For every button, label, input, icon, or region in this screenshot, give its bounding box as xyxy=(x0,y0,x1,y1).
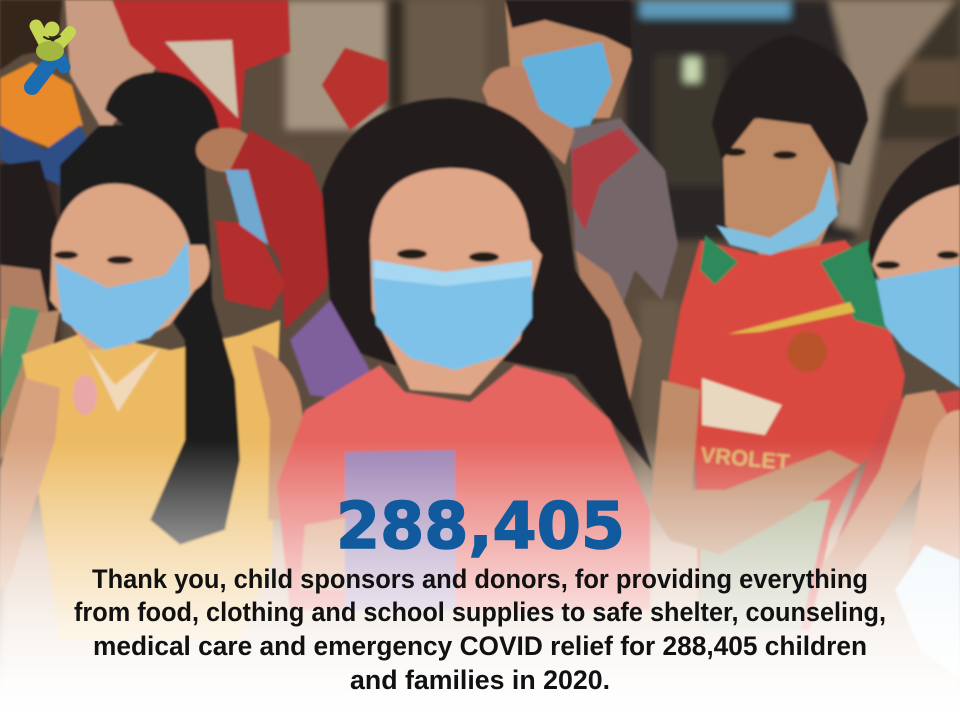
white bottom fade xyxy=(0,440,960,720)
message text: medical care and emergency COVID relief for 288,405 children xyxy=(93,631,867,661)
message text: from food, clothing and school supplies to safe shelter, counseling, xyxy=(74,597,886,627)
standing child in red xyxy=(105,0,388,330)
rear boy with mask xyxy=(482,0,678,400)
left girl xyxy=(0,125,303,640)
logo xyxy=(32,22,70,87)
message text xyxy=(74,564,886,695)
message text: and families in 2020. xyxy=(350,665,610,695)
big number: 288,405 xyxy=(336,490,625,564)
message text: Thank you, child sponsors and donors, for providing everything xyxy=(92,564,868,594)
right boy: VROLET xyxy=(700,442,791,475)
center girl xyxy=(277,98,652,610)
top left child xyxy=(0,0,158,185)
right girl xyxy=(820,135,960,680)
right boy xyxy=(650,35,905,630)
